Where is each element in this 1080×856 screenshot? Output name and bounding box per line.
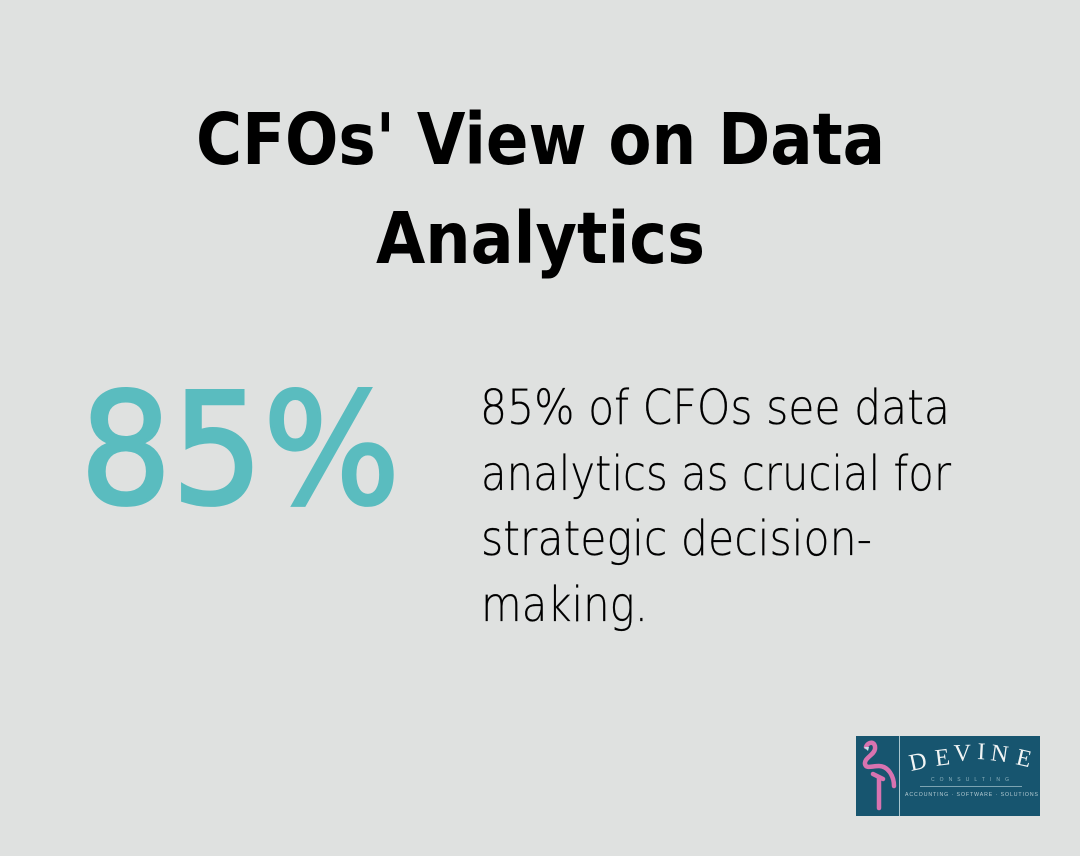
logo tagline: ACCOUNTING · SOFTWARE · SOLUTIONS [905, 792, 1039, 798]
logo subtitle: CONSULTING [931, 777, 1009, 783]
big statistic: 85%: 85% [80, 361, 400, 540]
logo wordmark: D [907, 748, 929, 777]
title [196, 98, 885, 280]
logo wordmark: E [1014, 745, 1034, 773]
logo wordmark: E [934, 744, 951, 772]
description text [480, 380, 951, 633]
title: Analytics [376, 197, 705, 280]
icon: flamingo beak [864, 747, 869, 751]
logo divider [899, 736, 900, 816]
description text: strategic decision- [481, 511, 872, 567]
logo wordmark: I [977, 739, 986, 765]
description text: 85% of CFOs see data [480, 380, 950, 436]
description text: analytics as crucial for [481, 446, 951, 502]
description text: making. [481, 577, 648, 633]
logo wordmark [907, 739, 1034, 777]
logo wordmark: N [989, 740, 1010, 768]
title: CFOs' View on Data [196, 98, 885, 181]
logo wordmark: V [953, 740, 972, 767]
icon: flamingo [865, 743, 894, 808]
logo: Devine Consulting [856, 736, 1040, 816]
